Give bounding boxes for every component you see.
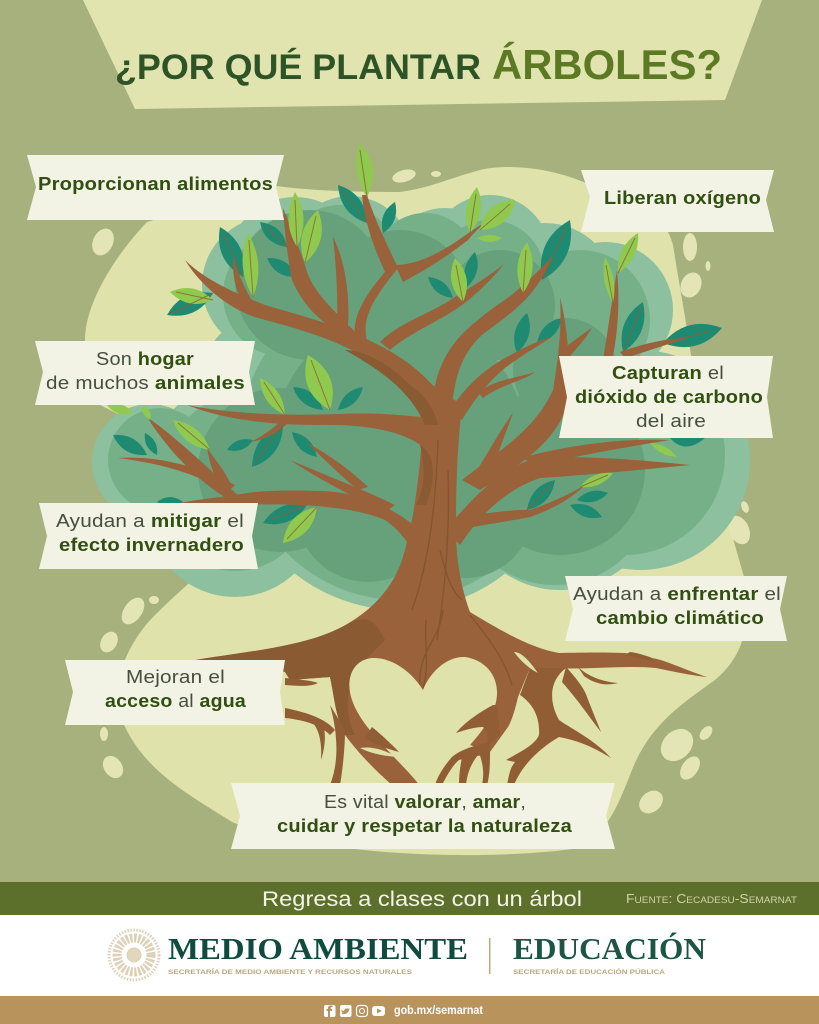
branch: middle left — [187, 405, 440, 505]
ribbon: Es vital valorar, amar, cuidar y respetar la naturaleza: Es vital valorar , amar, — [324, 792, 526, 812]
ribbon: Es vital valorar, amar, cuidar y respetar la naturaleza: cuidar y respetar la naturaleza — [277, 816, 573, 836]
ribbon: Liberan oxígeno: Liberan oxígeno — [604, 188, 761, 208]
ribbon: Son hogar de muchos animales: Son hogar — [96, 349, 194, 369]
title text: ¿POR QUÉ PLANTAR — [115, 47, 481, 87]
light green leaves — [107, 143, 677, 543]
branch: upper left long — [185, 260, 440, 405]
ribbon: Ayudan a mitigar el efecto invernadero: Ayudan a mitigar el — [56, 511, 244, 531]
ribbon: Mejoran el acceso al agua: Mejoran el — [126, 667, 225, 687]
ribbon: Capturan el dióxido de carbono del aire: Capturan el — [612, 363, 724, 383]
tree trunk and branches — [118, 195, 707, 785]
canopy middle layer — [108, 205, 725, 600]
trunk bark lines — [412, 440, 512, 688]
tree canopy — [92, 195, 750, 610]
ribbon: Ayudan a enfrentar el cambio climático — [565, 576, 787, 641]
heart-shaped gap between roots — [349, 657, 497, 787]
ribbon: Son hogar de muchos animales — [35, 341, 255, 405]
ribbon: Proporcionan alimentos — [27, 155, 284, 220]
tree roots — [285, 652, 656, 785]
title banner — [83, 0, 762, 109]
canopy inner layer — [198, 210, 645, 582]
logo: Educación: EDUCACIÓN — [513, 931, 706, 966]
ribbon: Proporcionan alimentos: Proporcionan alimentos — [38, 174, 273, 194]
ribbon: Capturan el dióxido de carbono del aire — [559, 356, 773, 438]
ribbon: Ayudan a mitigar el efecto invernadero: efecto invernadero — [59, 535, 244, 555]
trunk body with root mass — [190, 380, 707, 785]
tan social band — [0, 996, 819, 1024]
decorative pale drops — [88, 167, 754, 818]
pale background blob — [84, 167, 747, 855]
ribbon: Son hogar de muchos animales: de muchos animales — [46, 373, 245, 393]
social icons — [324, 1005, 385, 1017]
branch: lower left — [172, 490, 425, 560]
branch: lower right — [445, 457, 690, 545]
source: Fuente: Cecadesu-Semarnat — [626, 892, 798, 906]
campaign slogan: Regresa a clases con un árbol — [262, 888, 582, 911]
ribbon: Mejoran el acceso al agua — [65, 660, 285, 725]
seal — [109, 930, 159, 980]
ribbon: Ayudan a mitigar el efecto invernadero — [39, 503, 258, 569]
branch: top centre — [355, 195, 398, 345]
ribbon: Ayudan a enfrentar el cambio climático: Ayudan a enfrentar el — [573, 584, 781, 604]
white logo band: SECRETARÍA DE EDUCACIÓN PÚBLICA — [513, 967, 665, 976]
title banner: ÁRBOLES? — [492, 41, 722, 88]
ribbon: Es vital valorar, amar, cuidar y respetar la naturaleza — [231, 783, 615, 849]
ribbon: Mejoran el acceso al agua: acceso al agua — [105, 691, 247, 711]
white logo band — [0, 915, 819, 996]
ribbon: Ayudan a enfrentar el cambio climático: cambio climático — [596, 608, 764, 628]
dark teal leaves — [113, 185, 722, 524]
leaf veins — [172, 150, 712, 539]
logo: Medio Ambiente: MEDIO AMBIENTE — [168, 931, 468, 966]
canopy outer layer — [92, 195, 750, 610]
branch: upper right — [433, 255, 553, 405]
ribbon: Liberan oxígeno — [581, 170, 774, 232]
website: gob.mx/semarnat — [394, 1005, 483, 1017]
darker shading on roots and branches — [190, 350, 438, 735]
white logo band: SECRETARÍA DE MEDIO AMBIENTE Y RECURSOS NATURALES — [168, 967, 413, 976]
pale slivers between root strands — [360, 652, 538, 757]
ribbon: Capturan el dióxido de carbono del aire: del aire — [636, 411, 706, 431]
ribbon: Capturan el dióxido de carbono del aire: dióxido de carbono — [575, 387, 763, 407]
green footer strip — [0, 882, 819, 915]
